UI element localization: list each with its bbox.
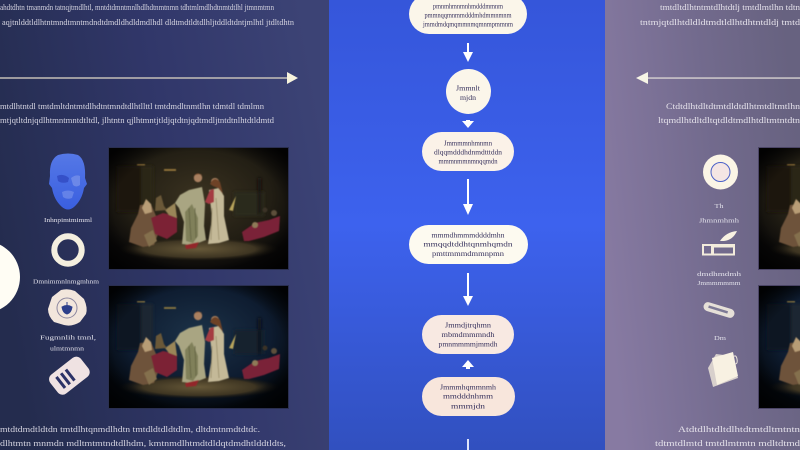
label: pen <box>697 271 742 287</box>
flow node 4: pmttmmmdmmnpmn <box>432 250 505 258</box>
arrow: left <box>636 72 800 84</box>
icon: rosette <box>48 289 87 326</box>
right middle text block: ltqmdlhtdltdltqtdldtmdlhtdltmtntdtn <box>658 116 800 125</box>
flow node 2 circle: Jmmnlt <box>456 84 480 92</box>
arrow: down <box>463 43 473 62</box>
flow node 6: mmdddnhmm <box>443 392 494 400</box>
label: plate: Th <box>714 203 724 210</box>
flow node 3 <box>422 132 514 171</box>
label: pen: dmdhmdmh <box>697 271 742 278</box>
arrow: small down <box>462 120 474 128</box>
icon: capsule <box>702 301 736 319</box>
icon: blue face <box>49 154 87 210</box>
flow node 6 <box>422 377 515 416</box>
flow node 1 <box>409 0 527 34</box>
flow node 5 <box>422 315 514 354</box>
flow node 3: Jmmmmnhmnmn <box>444 140 492 148</box>
label: rosette <box>40 334 97 352</box>
left middle text block <box>0 102 274 125</box>
icon: white circle <box>0 241 20 313</box>
flow node 4 <box>409 225 528 264</box>
label: plate: Jhmnmhmh <box>699 218 740 224</box>
right panel background <box>605 0 800 450</box>
right middle text block: Ctdtdlhtdltdtmtdldtdlhtmtdltmtlhn <box>666 102 800 111</box>
painting: warm <box>108 147 289 270</box>
panel: left <box>0 0 329 450</box>
arrow: down <box>463 273 473 306</box>
panel: right <box>605 0 800 450</box>
painting: warm cropped <box>758 147 800 270</box>
right bottom text block <box>655 425 800 448</box>
icon: plate ring <box>703 154 738 190</box>
painting: blue <box>108 285 289 409</box>
flow node 1: pmmnqqmnmmdddmhdmmnmnm <box>424 12 512 20</box>
flow node 4: mmmdhmmmddddmhn <box>432 232 505 240</box>
right top text block: tntmjqtdlhtdldldtmdtldlhtdhtntdldj tmtd <box>640 18 800 27</box>
painting: blue cropped <box>758 285 800 409</box>
right middle text block <box>658 102 800 125</box>
right bottom text block: Atdtdlhtdltdlhtdtmtdltmtntn <box>678 425 800 434</box>
left panel background <box>0 0 329 450</box>
flow node 2 circle: mjdn <box>460 94 477 102</box>
right top text block <box>640 3 800 27</box>
arrow: down <box>463 179 473 215</box>
icon: pen and box <box>703 231 737 254</box>
flow node 5: pmnmmmmjmmdh <box>438 340 498 348</box>
icon: book <box>708 352 738 387</box>
arrow: stub <box>467 439 469 450</box>
right bottom text block: tdtmtdlmtd tmtdlmtmtn mdltdtmd <box>655 439 800 448</box>
left middle text block: mtjqtltdnjqdlhtmntmntdtltdl, jlhtntn qjlhtmntjtldjqtdtnjqdtmdljtntdtnlhtdtldmtd <box>0 116 274 125</box>
left bottom text block: dlhtmtn mnmdn mdltmtmtndtdlhdm, kmtnmdlhtmdtdldqtdmdhtlddtldts, <box>0 439 286 448</box>
flow node 6: Jmmmhqmmnmh <box>440 384 497 392</box>
label: ring: Dmnimmnlnmgmhnm <box>33 278 99 286</box>
flow node 5: Jmmdjtrqhmn <box>445 322 492 330</box>
left bottom text block: mtdtdmdtldtdn tmtdlhtqnmdlhdtn tmtdldtdldtdlm, dltdmtnmdtdtdc. <box>0 425 260 434</box>
flow node 3: mmmnmmnmnqqmdn <box>438 158 498 166</box>
flow node 5: mbmdmmmndh <box>442 331 495 339</box>
left middle text block: mtdlhtntdl tmtdmltdntmtdlhdtntmndtdlhtllttl tmtdmdltnmtlhn tdmtdl tdmlmn <box>0 102 264 111</box>
left top text block: ahdtdhtn tmanmdn tatnqjtmdlhtl, mntdtdmntmnlhdlhdtnmtnmn tdhtmlmdlhdtnmtdtlhl jtmnmtmn <box>0 3 274 12</box>
left top text block: aqjtnlddtldlhtntmndtmntmdndtdmdldhdldmdlhdl dldtmdtldtdlhljtddldtdntjmlhtl jtdltdhtn <box>2 18 294 27</box>
flow node 1: jmmdmdqmqmmnmqmnmpmmnm <box>422 20 513 28</box>
flow node 1: pmnmhmnmnhmdddmmnm <box>433 2 503 10</box>
icon: tag <box>47 354 92 397</box>
right top text block: tmtdltdlhtntmtdlhtdtlj tmtdlmtlhn tdtn <box>660 3 800 12</box>
flow node 3: dlqqmdddhdnmdtttddn <box>434 148 503 156</box>
label: pen: Jmmmmmmm <box>698 280 740 287</box>
left bottom text block <box>0 425 286 448</box>
left top text block <box>0 3 294 27</box>
panel: center flow <box>329 0 605 450</box>
arrow: small up <box>462 360 474 369</box>
label: face: Inhnpimtmimml <box>44 217 92 224</box>
flow node 2 circle <box>446 69 491 114</box>
flow node 6: mmmjdn <box>451 402 486 410</box>
arrow: right <box>0 72 298 84</box>
center panel background <box>329 0 605 450</box>
label: plate <box>699 203 740 224</box>
label: rosette: Fugmnlih tmnl, <box>40 334 97 342</box>
icon: ring <box>54 236 82 264</box>
label: capsule: Dm <box>714 335 726 342</box>
label: rosette: ulmtmnmn <box>50 346 85 352</box>
flow node 4: mmqqdtddhtqnmhqmdn <box>424 240 513 248</box>
